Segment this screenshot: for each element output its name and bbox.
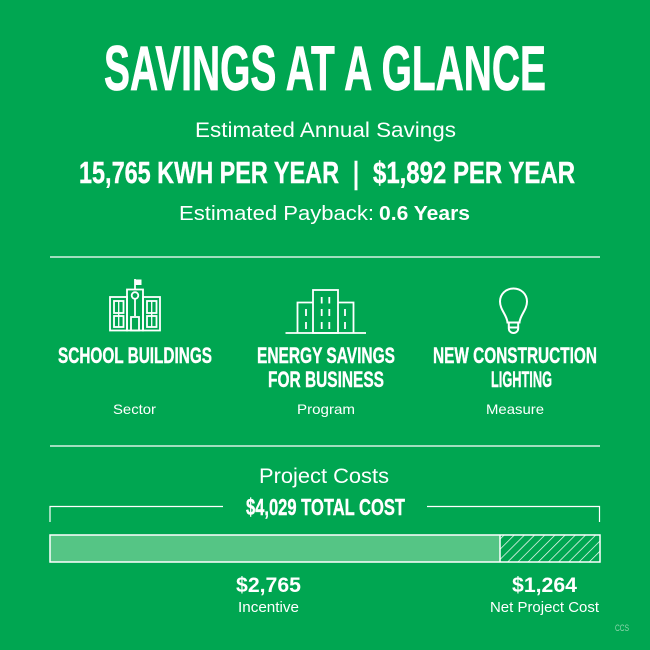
heading: project costs: Project Costs xyxy=(259,465,389,488)
savings figures: | xyxy=(353,155,359,190)
icon: school building xyxy=(110,279,160,330)
label: energy savings for business: FOR BUSINESS xyxy=(268,367,384,392)
subheading: estimated annual savings: Estimated Annual Savings xyxy=(195,119,456,142)
savings figures: 15,765 KWH PER YEAR xyxy=(79,155,339,190)
label: new construction lighting: LIGHTING xyxy=(491,367,552,392)
value: incentive xyxy=(236,574,301,616)
total cost label: $4,029 TOTAL COST xyxy=(246,494,405,520)
savings figures xyxy=(79,155,575,190)
label: new construction lighting xyxy=(433,343,597,392)
value: incentive: Incentive xyxy=(238,600,299,616)
icon: light bulb xyxy=(500,288,527,333)
label: energy savings for business xyxy=(257,343,395,392)
bar segment: incentive xyxy=(50,535,500,562)
estimated payback xyxy=(179,203,470,225)
label: school buildings: SCHOOL BUILDINGS xyxy=(58,343,212,368)
panel: measure xyxy=(433,288,597,417)
estimated payback: 0.6 Years xyxy=(379,203,470,225)
bar segment: net project cost xyxy=(500,535,600,562)
caption: measure: Measure xyxy=(486,401,544,417)
value: net project cost: $1,264 xyxy=(512,574,577,597)
bracket: total cost xyxy=(50,506,600,522)
caption: sector: Sector xyxy=(113,401,156,417)
stacked cost bar xyxy=(50,535,600,562)
value: net project cost: Net Project Cost xyxy=(490,600,599,616)
caption: program: Program xyxy=(297,401,355,417)
savings figures: $1,892 PER YEAR xyxy=(373,155,575,190)
value: net project cost xyxy=(490,574,599,616)
value: incentive: $2,765 xyxy=(236,574,301,597)
panel: program xyxy=(257,290,395,417)
panel: sector xyxy=(58,279,212,417)
icon: office buildings xyxy=(286,290,366,333)
label: energy savings for business: ENERGY SAVINGS xyxy=(257,343,395,368)
estimated payback: Estimated Payback: xyxy=(179,203,374,225)
credit: CCS: CCS xyxy=(615,623,629,633)
